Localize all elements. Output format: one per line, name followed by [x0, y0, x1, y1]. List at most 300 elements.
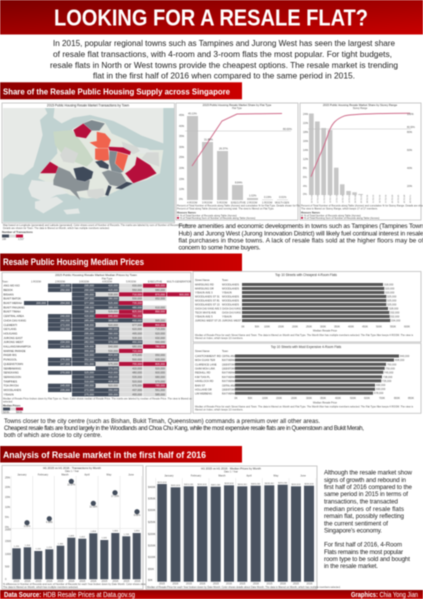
- month headers: [17, 472, 134, 476]
- table rows: 640,000: [108, 314, 119, 318]
- axis: 500K: [376, 324, 382, 328]
- panel: flat type pareto chart: 2015 Public Housing Resale Market Share by Flat Type: [203, 103, 272, 107]
- footnote: The data is filtered on Month, which has multiple members selected.: [3, 586, 79, 589]
- values: 745,000: [384, 370, 394, 374]
- map footnote: Details are shown for Town. The data is filtered on Month, which has multiple members selected.: [3, 227, 110, 230]
- panel: storey range pareto chart: 34 TO 36: [380, 194, 382, 203]
- table rows: 305,000: [84, 344, 95, 348]
- table rows: YISHUN: [4, 392, 14, 396]
- commentary: future amenities: Future amenities and economic developments in towns such as Tampines (Tampines Town: [178, 223, 423, 230]
- table rows: 285,000: [84, 327, 95, 331]
- table rows: 272,000: [60, 323, 71, 327]
- panel: median price table: 2015 Public Housing Resale Market Median Prices by Town: [55, 273, 137, 277]
- axis: 400K: [335, 396, 341, 400]
- table rows: 620,000: [155, 331, 166, 335]
- axes: 1000: [5, 552, 11, 556]
- table rows: BUKIT MERAH: [4, 301, 22, 305]
- table rows: 234,000: [60, 340, 71, 344]
- bar values: 1,894: [134, 531, 140, 533]
- commentary: market outlook: first half of 2016 compared to the: [324, 484, 413, 491]
- axis labels: 0%: [179, 197, 183, 201]
- footnote: % difference in Number of Records and sum of Number of Records for each Year broken down by Date Month. Color shows details about Year.: [3, 583, 161, 586]
- footnote: [3, 583, 161, 589]
- month headers: May: [274, 474, 279, 478]
- axes: [5, 476, 141, 583]
- map legend: 198: [2, 238, 7, 241]
- axes: 2015: [124, 579, 130, 583]
- axis: 350K: [334, 324, 340, 328]
- table rows: 293,000: [84, 384, 95, 388]
- panel: storey range pareto chart: 43 TO 45: [398, 194, 400, 203]
- table rows: 495,000: [132, 331, 143, 335]
- street and town labels: CANTONMENT RD: [195, 354, 221, 358]
- table rows: 410,000: [108, 371, 119, 375]
- title banner: LOOKING FOR A RESALE FLAT?: [54, 5, 368, 31]
- panel: storey range pareto chart: 10 TO 12: [330, 194, 332, 203]
- table rows: 455,000: [132, 392, 143, 396]
- section heading: analysis: [0, 446, 242, 462]
- table rows: 420,000: [108, 284, 119, 288]
- axis labels: 1 ROOM: [262, 200, 272, 204]
- axes: 2016: [112, 579, 119, 583]
- panel: median price by month chart: H1 2015 vs H1 2016 : Median Prices by Month: [201, 466, 261, 470]
- values: [374, 354, 410, 395]
- axis: 400K: [348, 324, 354, 328]
- table rows: 525,000: [108, 301, 119, 305]
- street and town labels: YISHUN AVE 3: [195, 290, 213, 294]
- bar values: [14, 531, 140, 551]
- values: 325,000: [387, 302, 397, 306]
- table rows: 630,000: [132, 284, 143, 288]
- street and town labels: WOODLANDS: [222, 282, 239, 286]
- commentary: towns and prices: Cheapest resale flats are found largely in the Woodlands and Choa Chu Kang, while the most expensive resale flats are in Queenstown and Bukit Merah,: [4, 426, 364, 432]
- table rows: 293,000: [84, 336, 95, 340]
- axis labels: 1.02%: [249, 194, 257, 198]
- axis: 800K: [394, 396, 400, 400]
- axes: 2016: [200, 582, 206, 586]
- table rows: 680,000: [132, 344, 143, 348]
- axis labels: 5 ROOM: [217, 200, 227, 204]
- table rows: 380,000: [108, 297, 119, 301]
- values: [384, 282, 401, 322]
- axes: 2015: [36, 579, 42, 583]
- commentary: market outlook: median prices of resale flats: [324, 506, 404, 513]
- axis labels: 10%: [179, 187, 185, 191]
- table rows: 254,000: [60, 301, 71, 305]
- street and town labels: YISHUN AVE 5: [195, 314, 213, 318]
- axis: 0K: [241, 324, 245, 328]
- table rows: 585,000: [155, 392, 166, 396]
- street and town labels: CLARENCE LANE: [195, 362, 217, 366]
- table footnote: Median of Resale Price broken down by Flat Type vs. Town. Color shows median of Resale Price. The marks are labeled by median of Resale Price. The view is filtered on Month, which has multiple members: [3, 398, 233, 400]
- footnote: Median of Resale Price for each Street Name and Town. The data is filtered on Month and Flat Type. The Month filter has multiple members selected. The Flat Type filter keeps 4 ROOM. The view is: [195, 406, 414, 408]
- table rows: 355,000: [84, 349, 95, 353]
- values: 318,000: [384, 282, 394, 286]
- panel: storey range pareto chart: 49 TO 51: [410, 194, 412, 203]
- axes: 10%: [5, 505, 11, 509]
- values: 334,000: [391, 318, 401, 322]
- axes: $250K: [148, 520, 156, 524]
- axes: 2015: [58, 579, 64, 583]
- bars: [235, 354, 399, 395]
- table rows: 805,000: [155, 284, 166, 288]
- table rows: 670,000: [155, 379, 166, 383]
- growth labels: 8.86%: [134, 515, 140, 517]
- month headers: February: [191, 474, 202, 478]
- table rows: 530,000: [132, 297, 143, 301]
- table footnote: [3, 398, 233, 403]
- panel: storey range pareto chart: 2015 Public Housing Resale Market Share by Storey Range: [323, 103, 398, 107]
- panel: cheapest streets chart: Top 10 Streets with Cheapest 4-Room Flats: [275, 273, 337, 277]
- map legend: Number of Transactions: [2, 230, 33, 234]
- axis labels: 12%: [303, 157, 309, 161]
- table rows: 800,000: [155, 323, 166, 327]
- values: 320,000: [385, 286, 395, 290]
- axis: 250K: [306, 324, 312, 328]
- axis: 100K: [264, 324, 270, 328]
- street and town labels: YISHUN: [222, 290, 232, 294]
- values: 332,000: [390, 314, 400, 318]
- axis: 700K: [379, 396, 385, 400]
- month headers: April: [84, 472, 90, 476]
- values: 328,000: [389, 306, 399, 310]
- table rows: 310,000: [84, 375, 95, 379]
- street and town labels: CENTRAL AREA: [222, 383, 235, 387]
- street and town labels: [195, 278, 242, 322]
- table rows: SERANGOON: [4, 375, 21, 379]
- bar values: 1,304: [25, 545, 31, 547]
- table rows: PASIR RIS: [4, 353, 17, 357]
- table rows: 370,000: [108, 366, 119, 370]
- table rows: 890,000: [155, 310, 166, 314]
- table rows: 430,000: [132, 318, 143, 322]
- table rows: 535,000: [132, 375, 143, 379]
- table rows: 285,000: [84, 318, 95, 322]
- footnote and legend: % of Total Number of Records along Table (Across): [304, 214, 361, 217]
- axis labels: 40%: [407, 166, 413, 170]
- street and town labels: GHIM MOH LINK: [195, 366, 215, 370]
- table rows: 677,000: [132, 323, 143, 327]
- axis: 100K: [262, 396, 268, 400]
- axis: 350K: [320, 396, 326, 400]
- axes: 25%: [5, 476, 11, 480]
- table rows: 561,000: [155, 388, 166, 392]
- table rows: 308,000: [84, 323, 95, 327]
- bar values: $415,000: [157, 482, 167, 484]
- table rows: 297,000: [84, 297, 95, 301]
- intro text: flat in the first half of 2016 when compared to the same period in 2015.: [93, 71, 355, 80]
- table rows: 290,000: [84, 288, 95, 292]
- table rows: 450,000: [132, 340, 143, 344]
- panel: expensive streets chart: Top 10 Streets with Most Expensive 4-Room Flats: [271, 345, 342, 349]
- axes: $400K: [148, 485, 156, 489]
- bar values: 1,683: [69, 535, 75, 537]
- table rows: CHOA CHU KANG: [4, 318, 26, 322]
- growth labels: [24, 484, 140, 528]
- axis labels: 20%: [179, 166, 185, 170]
- axis labels: 100%: [407, 112, 414, 116]
- panel: storey range pareto chart: 37 TO 39: [386, 194, 388, 203]
- axes: 2015: [293, 582, 299, 586]
- axis labels: 26.37%: [219, 146, 228, 150]
- table rows: 420,000: [132, 366, 143, 370]
- bar values: 1,866: [113, 531, 119, 533]
- commentary: market outlook: transactions, the transacted: [324, 498, 399, 506]
- axes: 2016: [24, 579, 31, 583]
- axis labels: 16%: [303, 139, 309, 143]
- axes: 2015: [80, 579, 86, 583]
- table rows: [4, 284, 190, 396]
- panel: storey range pareto chart: 28 TO 30: [367, 194, 369, 203]
- column headers: EXECUTIVE: [148, 280, 162, 284]
- table rows: 230,000: [60, 327, 71, 331]
- axis: [234, 396, 414, 404]
- growth labels: 3.09%: [24, 526, 30, 528]
- table rows: 475,000: [132, 353, 143, 357]
- street and town labels: WOODLANDS ST 31: [195, 294, 220, 298]
- table rows: 240,000: [60, 314, 71, 318]
- values: 332,000: [390, 310, 400, 314]
- table rows: 310,000: [84, 379, 95, 383]
- month headers: January: [164, 474, 174, 478]
- axis labels: 0.01%: [279, 195, 287, 199]
- panel: median price table: Flat Type: [102, 276, 113, 280]
- bar values: $410,000: [278, 482, 288, 484]
- commentary: market outlook: signs of growth and rebound in: [324, 477, 407, 484]
- street and town labels: BUKIT MERAH: [222, 375, 235, 379]
- table rows: 325,000: [84, 371, 95, 375]
- values: 735,000: [382, 379, 392, 383]
- table rows: ANG MO KIO: [4, 284, 20, 288]
- table rows: 550,000: [132, 288, 143, 292]
- table legend: $900k: [16, 412, 23, 414]
- table rows: GEYLANG: [4, 327, 16, 331]
- table rows: 520,000: [155, 366, 166, 370]
- panel: flat type pareto chart: Flat Type: [232, 107, 243, 110]
- table legend: [3, 404, 23, 414]
- column headers: [2, 280, 191, 284]
- commentary: market outlook: same period in 2015 in terms of: [324, 491, 408, 498]
- bar values: $400,000: [171, 485, 181, 487]
- commentary: market outlook: For first half of 2016, 4-Room: [324, 542, 402, 548]
- panel: storey range pareto chart: 01 TO 03: [324, 194, 326, 203]
- axes: 2015: [186, 582, 192, 586]
- axis labels: MULTI-GEN: [275, 200, 289, 204]
- street and town labels: JURONG WEST: [222, 318, 242, 322]
- table rows: JURONG EAST: [4, 336, 23, 340]
- panel: storey range pareto chart: 04 TO 06: [312, 194, 314, 203]
- commentary: towns and prices: Towns closer to the city centre (such as Bishan, Bukit Timah, Queenstown) commands a premium over all other areas.: [4, 419, 320, 425]
- axis: 300K: [306, 396, 312, 400]
- axes: 0%: [5, 525, 9, 529]
- axis labels: 45%: [179, 113, 185, 117]
- table rows: 715,000: [155, 327, 166, 331]
- table rows: 620,000: [132, 327, 143, 331]
- table rows: CENTRAL AREA: [4, 314, 24, 318]
- axes: 2000: [5, 528, 11, 532]
- panel: flat type pareto chart: [176, 103, 341, 220]
- table rows: 388,000: [108, 305, 119, 309]
- axis labels: 24%: [303, 112, 309, 116]
- panel: storey range pareto chart: 40 TO 42: [392, 194, 394, 203]
- axis: 150K: [276, 396, 282, 400]
- table rows: QUEENSTOWN: [4, 362, 23, 366]
- street and town labels: BAIN ST: [195, 383, 206, 387]
- axes: 500: [5, 564, 10, 568]
- table rows: 652,000: [155, 297, 166, 301]
- footnote and legend: % of Total Number of Records along Table (Across): [180, 214, 237, 217]
- table rows: BUKIT TIMAH: [4, 310, 20, 314]
- growth labels: 4.88%: [46, 522, 53, 524]
- table rows: 360,000: [108, 318, 119, 322]
- values: 690,000: [376, 387, 386, 391]
- axis labels: 6%: [303, 175, 307, 179]
- panel: median price by month chart: Date 1 / Year: [224, 470, 238, 474]
- table rows: KALLANG/WHAMPOA: [4, 344, 31, 348]
- axis: 50K: [255, 324, 260, 328]
- section heading: supply: Share of the Resale Public Housing Supply across Singapore: [3, 86, 230, 96]
- month headers: [164, 474, 306, 478]
- panel: storey range pareto chart: 46 TO 48: [404, 194, 406, 203]
- bar values: $404,000: [197, 484, 207, 486]
- footnote and legend: [177, 204, 341, 220]
- axes: 2016: [172, 582, 179, 586]
- panel: storey range pareto chart: 07 TO 09: [318, 194, 320, 203]
- axis labels: 80%: [407, 130, 413, 134]
- street and town labels: MARSILING DR: [195, 286, 214, 290]
- table rows: 538,000: [108, 292, 119, 296]
- panel: median price table: [2, 272, 233, 414]
- table rows: HOUGANG: [4, 331, 17, 335]
- values: 325,000: [387, 298, 397, 302]
- table rows: 710,000: [132, 292, 143, 296]
- axes: 2015: [102, 579, 108, 583]
- panel: transactions chart: H1 2015 vs H1 2016 : Transactions by Month: [43, 466, 101, 470]
- bar values: $406,000: [251, 483, 261, 485]
- axes: $300K: [148, 508, 156, 512]
- bar values: $401,000: [211, 484, 221, 486]
- axis labels: EXECUTIVE: [231, 200, 246, 204]
- table rows: 600,000: [155, 371, 166, 375]
- table rows: CLEMENTI: [4, 323, 17, 327]
- axes: 2016: [280, 582, 286, 586]
- map footnote: Map based on Longitude (generated) and Latitude (generated). Color shows count of Number of Records. The marks are labeled by sum of Number of Records and Town.: [3, 224, 192, 227]
- footnote and legend: Percent of Total along Table (Across) and running total. The view is filtered on Flat Type.: [177, 208, 275, 210]
- street and town labels: CHOA CHU KANG: [222, 306, 241, 310]
- axis: 150K: [278, 324, 284, 328]
- street and town labels: WOODLANDS ST 13: [195, 302, 220, 306]
- bar values: $404,000: [238, 484, 248, 486]
- axis: 200K: [292, 324, 298, 328]
- table rows: 376,000: [108, 336, 119, 340]
- axis: 850K: [408, 396, 414, 400]
- section heading: analysis: Analysis of Resale market in the first half of 2016: [3, 450, 206, 460]
- axis labels: 35%: [179, 134, 185, 138]
- table rows: 735,000: [132, 301, 143, 305]
- axis labels: 80.00%: [407, 127, 415, 129]
- axis labels: [303, 112, 415, 196]
- bar values: $408,000: [265, 483, 275, 485]
- street and town labels: Street Name: [195, 278, 210, 282]
- table rows: MARINE PARADE: [4, 349, 26, 353]
- axis: 550K: [390, 324, 396, 328]
- bar values: [157, 482, 314, 487]
- table rows: 404,000: [108, 353, 119, 357]
- axis labels: 0%: [303, 192, 307, 196]
- footnote: filtered on Index, which keeps 10 members.: [195, 408, 244, 411]
- street and town labels: Street Name: [195, 349, 210, 353]
- table rows: 380,000: [84, 292, 95, 296]
- axes: 2015: [159, 582, 165, 586]
- footer bar: [0, 590, 423, 599]
- table rows: PUNGGOL: [4, 358, 17, 362]
- bar values: $404,000: [184, 484, 194, 486]
- panel: storey range pareto chart: 16 TO 18: [342, 194, 344, 203]
- axis: 450K: [362, 324, 368, 328]
- map legend: [2, 230, 33, 241]
- table rows: 500,000: [132, 358, 143, 362]
- axes: 2016: [68, 579, 75, 583]
- panel: town map: 2015 Public Housing Resale Market Transactions by Town: [47, 104, 129, 108]
- cumulative line: [192, 114, 282, 166]
- table rows: 520,000: [108, 323, 119, 327]
- values: 738,000: [383, 375, 393, 379]
- axis labels: 60%: [407, 148, 413, 152]
- table rows: 272,000: [84, 388, 95, 392]
- table rows: BUKIT BATOK: [4, 297, 21, 301]
- footnote: filtered on Index, which keeps 10 members.: [195, 337, 244, 340]
- table rows: 755,000: [132, 362, 143, 366]
- footnote and legend: Measure Names: [177, 212, 197, 214]
- axis labels: 22%: [303, 121, 309, 125]
- street and town labels: CHOA CHU KANG AVE 3: [195, 306, 221, 310]
- street and town labels: KIM TIAN PL: [195, 375, 211, 379]
- table rows: 508,000: [132, 336, 143, 340]
- axes: 2015: [240, 582, 246, 586]
- table rows: 720,000: [132, 349, 143, 353]
- title banner: [0, 0, 423, 34]
- axes: 1500: [5, 539, 11, 543]
- table rows: 295,000: [84, 331, 95, 335]
- table rows: TOA PAYOH: [4, 384, 19, 388]
- bar values: 1,365: [58, 543, 64, 545]
- table rows: 408,000: [108, 379, 119, 383]
- footer bar: Data Source: HDB Resale Prices at Data.gov.sg: [4, 590, 135, 599]
- bar values: 1,652: [80, 536, 86, 538]
- commentary: market outlook: room type to be sold and bought: [324, 556, 410, 563]
- table rows: WOODLANDS: [4, 388, 21, 392]
- street and town labels: WOODLANDS: [222, 298, 239, 302]
- values: 320,000: [385, 290, 395, 294]
- table rows: 805,000: [155, 362, 166, 366]
- bars: [187, 116, 288, 200]
- street and town labels: REDHILL RD: [195, 370, 210, 374]
- bar values: 1,265: [14, 546, 20, 548]
- table rows: 295,000: [84, 284, 95, 288]
- table rows: 540,000: [108, 344, 119, 348]
- month headers: June: [128, 472, 134, 476]
- axis: [241, 324, 410, 332]
- axes: 2016: [253, 582, 259, 586]
- growth labels: 22.97%: [67, 484, 75, 486]
- table rows: 255,000: [60, 284, 71, 288]
- table rows: TAMPINES: [4, 379, 17, 383]
- street and town labels: WOODLANDS: [222, 302, 239, 306]
- commentary: market outlook: remain flat, possibly reflecting: [324, 513, 405, 520]
- table rows: 282,000: [84, 340, 95, 344]
- values: 678,000: [374, 391, 384, 395]
- street and town labels: HAVELOCK RD: [195, 379, 214, 383]
